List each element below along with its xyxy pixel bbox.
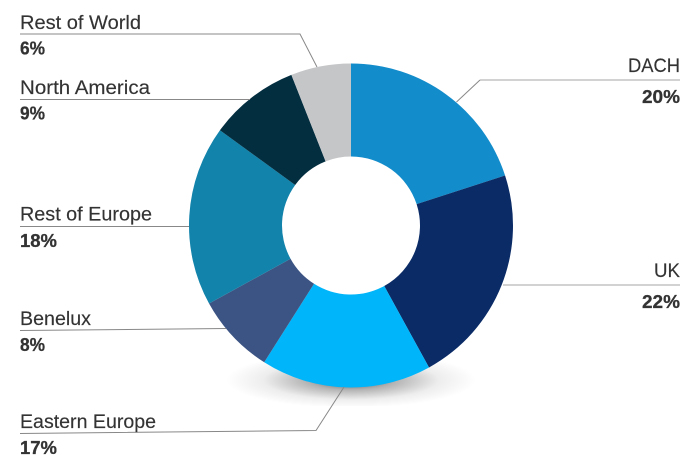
label: Eastern Europe: Eastern Europe [20, 412, 156, 433]
label: North America: 9% [20, 102, 45, 124]
label: Rest of World [20, 13, 317, 67]
segment: Rest of Europe 18% [189, 130, 295, 304]
label: Rest of Europe: 18% [20, 230, 57, 251]
segment: North America 9% [220, 75, 326, 185]
label: UK [503, 261, 680, 312]
label: DACH: DACH [628, 56, 680, 77]
segment: Rest of World 6% [291, 64, 351, 161]
label: Rest of Europe: Rest of Europe [20, 204, 152, 226]
label: UK: 22% [642, 291, 680, 312]
label: UK: UK [654, 261, 680, 282]
label: North America: North America [20, 78, 150, 99]
label: Benelux [20, 309, 226, 355]
label: North America [20, 78, 250, 124]
segment: DACH 20% [351, 64, 505, 204]
label: DACH [456, 56, 680, 107]
label: Eastern Europe: 17% [20, 437, 57, 458]
label: Benelux: 8% [20, 334, 45, 355]
donut shadow [244, 365, 458, 404]
segment: Benelux 8% [209, 259, 314, 362]
segment: Eastern Europe 17% [264, 284, 429, 387]
label: Rest of World: Rest of World [20, 13, 141, 34]
label: DACH: 20% [642, 86, 680, 107]
label: Benelux: Benelux [20, 309, 92, 330]
segment: UK 22% [384, 175, 513, 367]
label: Rest of World: 6% [20, 38, 45, 58]
label: Rest of Europe [20, 204, 189, 251]
label: Eastern Europe [20, 387, 344, 458]
donut chart [189, 64, 513, 387]
